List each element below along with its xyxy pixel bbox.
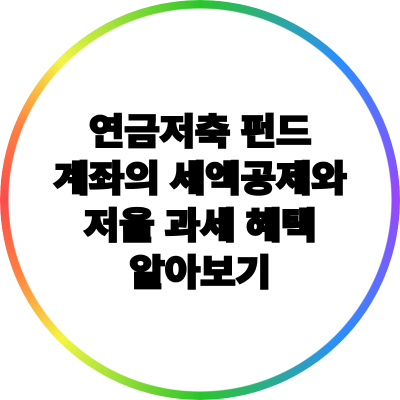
title line 1: 연금저축 펀드 bbox=[89, 111, 311, 152]
title line 3: 저율 과세 혜택 bbox=[84, 205, 316, 246]
title line 2: 계좌의 세액공제와 bbox=[53, 158, 347, 199]
title line 4: 알아보기 bbox=[129, 252, 271, 293]
